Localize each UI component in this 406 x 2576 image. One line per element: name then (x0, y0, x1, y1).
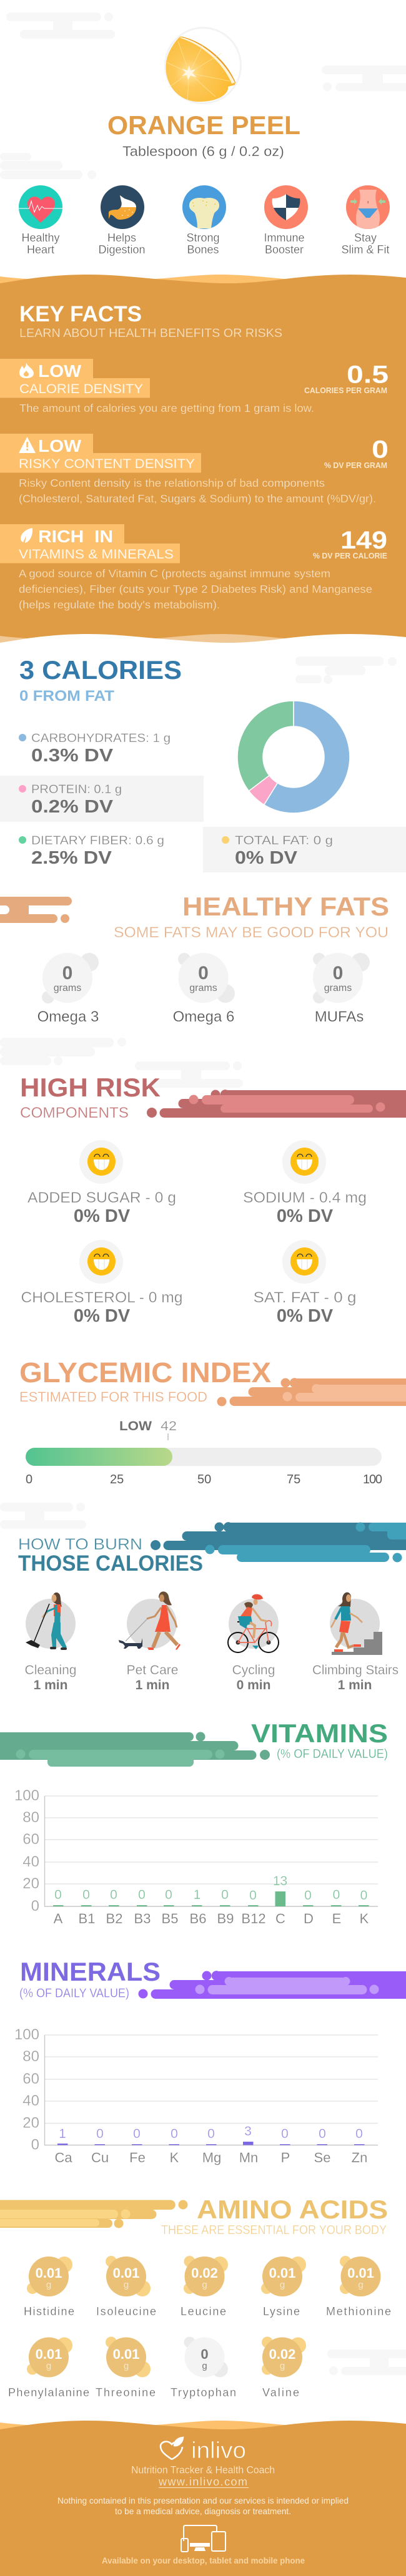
bar chart: vitamins: 0 (110, 1888, 117, 1902)
bar chart: vitamins: 40 (22, 1853, 39, 1870)
logo wordmark: inlivo (191, 2437, 246, 2463)
risk: sodium (243, 1140, 367, 1226)
bar chart: minerals: 40 (22, 2092, 39, 2109)
amino: phenylalanine: Phenylalanine (8, 2386, 89, 2399)
icon: immune booster: Booster (265, 243, 304, 256)
amino: lysine (261, 2256, 306, 2318)
gauge label: 42 (161, 1419, 177, 1433)
bar chart: vitamins: 0 (54, 1888, 62, 1902)
legend: dietary fiber (19, 834, 164, 868)
fact: calorie density: CALORIES PER GRAM (304, 386, 387, 395)
icon: slim and fit (341, 185, 390, 256)
bar chart: vitamins: 100 (14, 1787, 39, 1804)
icon: digestion: Helps (107, 232, 136, 244)
fact: risky content density: (Cholesterol, Saturated Fat, Sugars & Sodium) to the amount (%DV/gr). (19, 492, 376, 505)
amino: valine: 0.02 (269, 2346, 295, 2362)
risk: cholesterol: CHOLESTEROL - 0 mg (21, 1289, 182, 1306)
panel: amino acids (0, 2195, 391, 2399)
gauge scale: 0 (26, 1473, 32, 1486)
fact: risky content density: LOW (38, 436, 82, 456)
amino: isoleucine (96, 2256, 156, 2318)
tagline: Nutrition Tracker & Health Coach (131, 2465, 275, 2476)
bar chart: vitamins: 13 (273, 1874, 287, 1888)
bar chart: minerals (14, 2026, 378, 2165)
bar chart: minerals: Zn (352, 2150, 367, 2165)
amino: lysine: g (280, 2280, 285, 2290)
gauge label: LOW (119, 1419, 152, 1433)
bar chart: minerals: 80 (22, 2048, 39, 2065)
fact: calorie density: CALORIE DENSITY (19, 381, 143, 396)
bar chart: vitamins (14, 1787, 378, 1926)
amino: isoleucine: Isoleucine (96, 2305, 156, 2318)
activity: climbing stairs: 1 min (338, 1678, 372, 1692)
fact: risky content density: RISKY CONTENT DENSITY (19, 456, 195, 471)
bar chart: vitamins: K (360, 1911, 369, 1926)
panel: how to burn calories (18, 1522, 406, 1692)
fact: calorie density (0, 359, 389, 414)
activity: cleaning: Cleaning (25, 1663, 76, 1677)
legend: carbohydrates: 0.3% DV (31, 746, 114, 766)
decorative stripe (147, 1090, 406, 1118)
panel: glycemic index (19, 1357, 406, 1486)
gauge label (119, 1419, 177, 1440)
activity: cleaning (25, 1593, 76, 1692)
fact: risky content density (0, 434, 389, 505)
bar chart: minerals: 1 (59, 2127, 66, 2141)
logo mark (161, 2437, 183, 2459)
activity: climbing stairs: Climbing Stairs (312, 1663, 399, 1677)
risk: added sugar (27, 1140, 176, 1226)
bar chart: minerals: 100 (14, 2026, 39, 2043)
amino: tryptophan: Tryptophan (171, 2386, 236, 2399)
panel: vitamins (0, 1719, 388, 1926)
fat: omega 3: Omega 3 (37, 1008, 99, 1025)
legend: dietary fiber: 2.5% DV (31, 848, 112, 868)
panel: footer (0, 2421, 406, 2576)
amino: leucine: Leucine (181, 2305, 226, 2318)
gauge scale: 25 (110, 1473, 124, 1486)
bar chart: vitamins: 0 (138, 1888, 146, 1902)
amino: lysine: 0.01 (269, 2265, 295, 2281)
fact: rich in vitamins and minerals: deficiencies), Fiber (cuts your Type 2 Diabetes Risk) and Manganese (19, 583, 372, 595)
fat: omega 6: 0 (198, 963, 209, 983)
fact: calorie density: The amount of calories you are getting from 1 gram is low. (19, 402, 314, 414)
decorative clouds: header (0, 12, 406, 179)
heading: MINERALS (20, 1957, 161, 1986)
risk: saturated fat: SAT. FAT - 0 g (254, 1289, 356, 1306)
amino: threonine (96, 2336, 156, 2399)
website link: www.inlivo.com (158, 2476, 247, 2488)
fact: calorie density: LOW (38, 361, 82, 381)
bar chart: minerals: 0 (171, 2127, 178, 2141)
bar chart: vitamins: B6 (190, 1911, 206, 1926)
amino: histidine: Histidine (24, 2305, 74, 2318)
legend: protein (0, 776, 204, 822)
fact: risky content density: 0 (372, 436, 389, 463)
risk: saturated fat: 0% DV (277, 1306, 334, 1326)
heading: 3 CALORIES (19, 655, 182, 685)
bar chart: minerals: 0 (133, 2127, 141, 2141)
bar chart: vitamins: B12 (241, 1911, 266, 1926)
disclaimer (57, 2496, 349, 2516)
fat: omega 3 (37, 953, 99, 1025)
legend: total fat: TOTAL FAT: 0 g (235, 834, 333, 847)
bar chart: minerals: Se (314, 2150, 330, 2165)
activity: pet care: 1 min (136, 1678, 169, 1692)
heading: AMINO ACIDS (197, 2195, 388, 2224)
icon: devices (181, 2525, 225, 2552)
amino: threonine: 0.01 (113, 2346, 139, 2362)
panel: high risk (20, 1073, 406, 1326)
fact: rich in vitamins and minerals: VITAMINS & MINERALS (19, 547, 174, 562)
wave into white (0, 634, 285, 649)
bar chart: vitamins: 0 (31, 1898, 39, 1915)
icon: strong bones: Bones (187, 243, 219, 256)
icon: healthy heart (19, 185, 62, 256)
heading: KEY FACTS (19, 302, 142, 326)
amino: valine: g (280, 2361, 285, 2371)
bar chart: minerals: 3 (244, 2124, 252, 2139)
risk: sodium: SODIUM - 0.4 mg (243, 1189, 367, 1206)
icon: strong bones: Strong (186, 232, 220, 244)
activity: cycling: Cycling (232, 1663, 275, 1677)
activity: cleaning: 1 min (34, 1678, 67, 1692)
icon: immune booster (264, 185, 308, 256)
legend: total fat (203, 827, 406, 872)
donut chart (237, 701, 350, 813)
heading: GLYCEMIC INDEX (19, 1357, 271, 1388)
fact: rich in vitamins and minerals: RICH IN (38, 527, 113, 546)
hero: orange slice photo (165, 27, 241, 104)
heading: HIGH RISK (20, 1073, 161, 1102)
fat: omega 6: grams (189, 983, 217, 993)
bar chart: vitamins: B9 (217, 1911, 234, 1926)
activity: climbing stairs (312, 1593, 399, 1692)
availability note: Available on your desktop, tablet and mobile phone (102, 2555, 305, 2565)
bar chart: vitamins: E (332, 1911, 341, 1926)
disclaimer: Nothing contained in this presentation and our services is intended or implied (57, 2496, 349, 2505)
fact: rich in vitamins and minerals (0, 524, 387, 611)
amino: valine: Valine (262, 2386, 299, 2399)
amino: histidine (24, 2256, 74, 2318)
amino: isoleucine: g (124, 2280, 129, 2290)
bar chart: vitamins: 0 (165, 1888, 172, 1902)
activity: cycling: 0 min (237, 1678, 270, 1692)
fat: omega 6 (173, 953, 235, 1025)
legend: protein: PROTEIN: 0.1 g (31, 783, 122, 796)
icon: digestion: Digestion (98, 243, 146, 256)
bar chart: minerals: 0 (96, 2127, 104, 2141)
legend: protein: 0.2% DV (31, 797, 114, 817)
bar chart: minerals: Fe (129, 2150, 146, 2165)
bar chart: vitamins: 80 (22, 1809, 39, 1826)
sub heading: SOME FATS MAY BE GOOD FOR YOU (114, 924, 389, 941)
icon: digestion (98, 185, 146, 256)
amino: threonine: Threonine (96, 2386, 156, 2399)
risk: sodium: 0% DV (277, 1206, 334, 1226)
bar chart: vitamins: 20 (22, 1875, 39, 1892)
bar chart: vitamins: 0 (221, 1888, 229, 1902)
sub heading: ESTIMATED FOR THIS FOOD (19, 1389, 207, 1405)
amino: leucine: 0.02 (191, 2265, 218, 2281)
bar chart: vitamins: B3 (134, 1911, 151, 1926)
heading line one: HOW TO BURN (18, 1536, 142, 1553)
amino: methionine: g (358, 2280, 364, 2290)
icon: healthy heart: Healthy (21, 232, 60, 244)
bar chart: minerals: 0 (281, 2127, 289, 2141)
icon: immune booster: Immune (264, 232, 305, 244)
bar chart: minerals: K (170, 2150, 179, 2165)
risk: saturated fat (254, 1240, 356, 1326)
fact: risky content density: % DV PER GRAM (324, 461, 387, 470)
risk: cholesterol (21, 1240, 182, 1326)
amino: phenylalanine: g (46, 2361, 51, 2371)
amino: leucine (181, 2256, 228, 2318)
amino: histidine: g (46, 2280, 51, 2290)
gauge bar (26, 1448, 382, 1466)
decorative stripe (151, 1522, 406, 1563)
fat: mufas (313, 953, 370, 1025)
decorative clouds: between fats and risk (0, 1038, 243, 1088)
decorative stripe (0, 2200, 187, 2228)
decorative cloud: above burn section (0, 1503, 86, 1529)
panel: healthy fats (0, 892, 389, 1025)
bar chart: minerals: Ca (54, 2150, 72, 2165)
title: ORANGE PEEL (107, 110, 300, 140)
icon: strong bones (182, 185, 226, 256)
bar chart: minerals: 20 (22, 2114, 39, 2132)
amino: phenylalanine: 0.01 (36, 2346, 62, 2362)
fat: mufas: 0 (333, 963, 343, 983)
decorative stripe (217, 1378, 406, 1407)
bar chart: vitamins: B5 (162, 1911, 178, 1926)
bar chart: minerals: Mg (202, 2150, 221, 2165)
bar chart: vitamins: 60 (22, 1831, 39, 1848)
bar chart: minerals: 0 (207, 2127, 215, 2141)
gauge scale (26, 1473, 382, 1486)
legend: total fat: 0% DV (235, 848, 298, 868)
amino: valine (262, 2336, 306, 2399)
amino: methionine: Methionine (326, 2305, 391, 2318)
disclaimer: to be a medical advice, diagnosis or treatment. (115, 2506, 291, 2516)
heading: HEALTHY FATS (182, 892, 389, 921)
amino: leucine: g (202, 2280, 207, 2290)
activity: cycling (228, 1594, 279, 1692)
fat: mufas: grams (324, 983, 352, 993)
legend: dietary fiber: DIETARY FIBER: 0.6 g (31, 834, 164, 847)
bar chart: vitamins: 1 (194, 1888, 201, 1902)
icon: slim and fit: Stay (354, 232, 377, 244)
sub heading: THESE ARE ESSENTIAL FOR YOUR BODY (161, 2223, 387, 2237)
risk: added sugar: 0% DV (74, 1206, 131, 1226)
sub heading: COMPONENTS (20, 1105, 129, 1121)
sub heading: (% OF DAILY VALUE) (19, 1987, 129, 2001)
bar chart: vitamins: C (275, 1911, 285, 1926)
decorative cloud: amino (327, 2349, 406, 2375)
legend: carbohydrates: CARBOHYDRATES: 1 g (31, 731, 171, 745)
amino: histidine: 0.01 (36, 2265, 62, 2281)
amino: methionine: 0.01 (347, 2265, 374, 2281)
fat: omega 3: grams (54, 983, 81, 993)
decorative stripe (139, 1971, 406, 1999)
gauge scale: 50 (197, 1473, 211, 1486)
bar chart: vitamins: 0 (333, 1888, 340, 1902)
amino: phenylalanine (8, 2338, 89, 2399)
fact: calorie density: 0.5 (347, 361, 389, 388)
fat: omega 3: 0 (62, 963, 72, 983)
icon: healthy heart: Heart (27, 243, 54, 256)
bar chart: minerals: 0 (355, 2127, 363, 2141)
sub heading: (% OF DAILY VALUE) (277, 1747, 388, 1761)
bar chart: minerals: 0 (31, 2137, 39, 2153)
heading: VITAMINS (251, 1719, 388, 1748)
bar chart: minerals: Mn (239, 2150, 258, 2165)
icon: slim and fit: Slim & Fit (341, 243, 390, 256)
risk: added sugar: ADDED SUGAR - 0 g (27, 1189, 176, 1206)
fact: risky content density: Risky Content density is the relationship of bad components (19, 477, 325, 489)
fact: rich in vitamins and minerals: % DV PER CALORIE (313, 552, 387, 560)
activity: pet care (119, 1591, 181, 1692)
bar chart: minerals: P (281, 2150, 290, 2165)
sub heading: LEARN ABOUT HEALTH BENEFITS OR RISKS (19, 327, 282, 340)
panel: calories (0, 655, 406, 872)
amino: tryptophan: 0 (201, 2346, 209, 2362)
benefit icons row (19, 185, 390, 256)
amino: tryptophan: g (202, 2361, 207, 2371)
bar chart: vitamins: B2 (106, 1911, 122, 1926)
fact: rich in vitamins and minerals: (helps regulate the body's metabolism). (19, 598, 220, 611)
legend: carbohydrates (19, 731, 171, 766)
risk: cholesterol: 0% DV (74, 1306, 131, 1326)
serving size subtitle: Tablespoon (6 g / 0.2 oz) (122, 144, 284, 159)
bar chart: vitamins: A (54, 1911, 63, 1926)
amino: isoleucine: 0.01 (113, 2265, 139, 2281)
amino: threonine: g (124, 2361, 129, 2371)
bar chart: vitamins: 0 (304, 1888, 312, 1903)
gauge scale: 100 (363, 1473, 382, 1486)
fat: mufas: MUFAs (315, 1008, 364, 1025)
bar chart: vitamins: D (304, 1911, 314, 1926)
sub heading: 0 FROM FAT (19, 688, 114, 705)
bar chart: vitamins: 0 (82, 1888, 90, 1902)
bar chart: minerals: 0 (319, 2127, 326, 2141)
amino: lysine: Lysine (263, 2305, 300, 2318)
decorative stripe (0, 1732, 270, 1767)
bar chart: minerals: Cu (91, 2150, 109, 2165)
activity: pet care: Pet Care (127, 1663, 178, 1677)
bar chart: minerals: 60 (22, 2071, 39, 2087)
amino: tryptophan (171, 2336, 236, 2399)
panel: key facts (0, 275, 406, 649)
fact: rich in vitamins and minerals: A good source of Vitamin C (protects against immune system (19, 567, 330, 580)
amino: methionine (326, 2256, 391, 2318)
bar chart: vitamins: 0 (249, 1888, 257, 1903)
panel: minerals (14, 1957, 406, 2165)
bar chart: vitamins: B1 (79, 1911, 95, 1926)
fat: omega 6: Omega 6 (173, 1008, 234, 1025)
fact: rich in vitamins and minerals: 149 (340, 527, 387, 554)
bar chart: vitamins: 0 (360, 1888, 367, 1903)
gauge scale: 75 (287, 1473, 300, 1486)
heading line two: THOSE CALORIES (18, 1551, 203, 1576)
